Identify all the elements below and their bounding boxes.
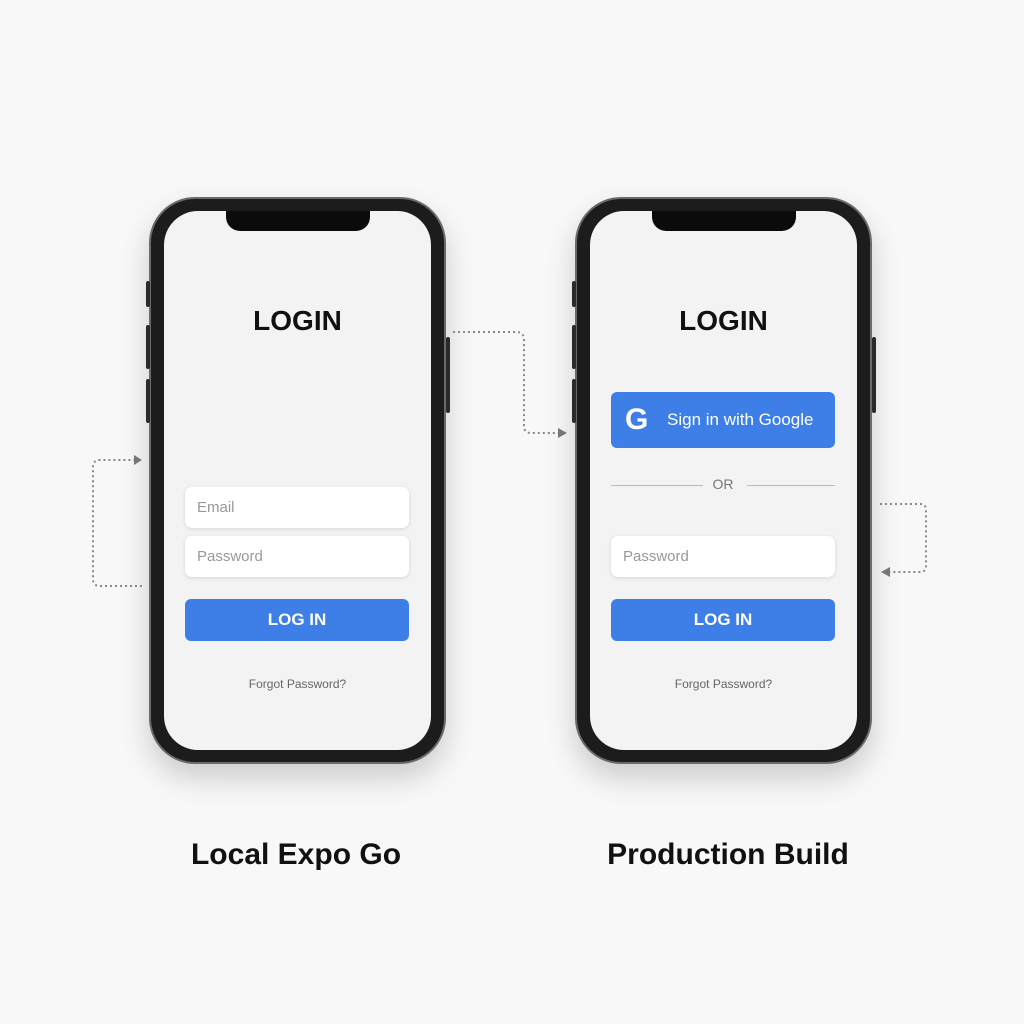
google sign in button: [611, 392, 835, 448]
password field: [611, 536, 835, 577]
heading: login: LOGIN: [253, 305, 342, 336]
login button: [185, 599, 409, 641]
arrow: left loop: [93, 332, 926, 586]
caption: production build: Production Build: [607, 838, 849, 871]
login button: LOG IN: [694, 610, 752, 629]
heading: login: LOGIN: [679, 305, 768, 336]
icon: google G: G: [625, 403, 648, 436]
password field: Password: [623, 548, 689, 565]
google sign in button: Sign in with Google: [667, 410, 813, 429]
email field: [185, 487, 409, 528]
caption: local expo go: Local Expo Go: [191, 838, 401, 871]
phone: production build: [575, 197, 872, 764]
password field: Password: [197, 548, 263, 565]
screen: [164, 211, 431, 750]
forgot password: Forgot Password?: [249, 677, 346, 691]
login button: [611, 599, 835, 641]
password field: [185, 536, 409, 577]
or divider: OR: [712, 476, 734, 492]
screen: [590, 211, 857, 750]
forgot password: Forgot Password?: [675, 677, 772, 691]
side buttons: [146, 281, 150, 307]
email field: Email: [197, 499, 235, 516]
login button: LOG IN: [268, 610, 326, 629]
side buttons: [572, 281, 576, 307]
phone: local expo go: [149, 197, 446, 764]
